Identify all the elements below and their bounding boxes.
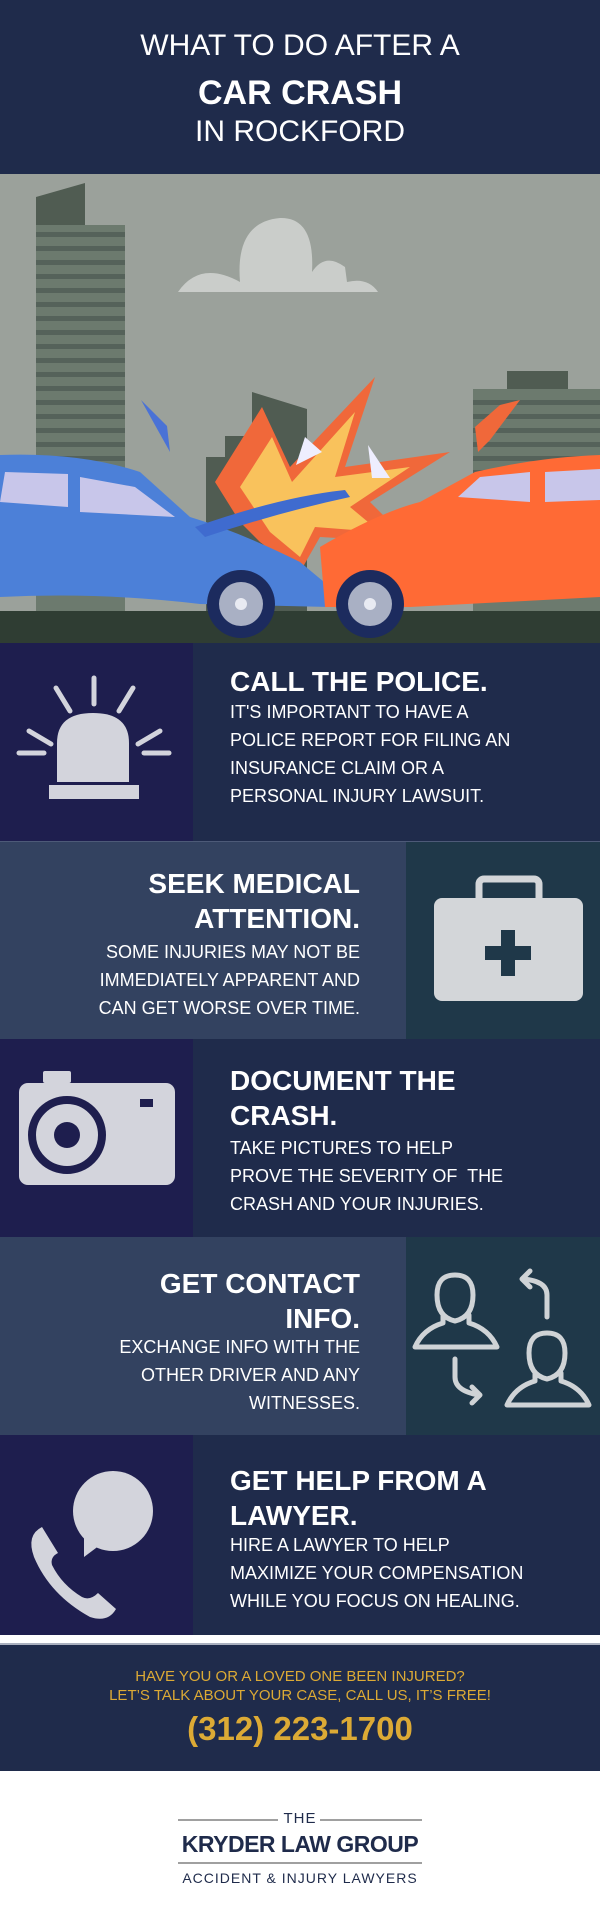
text: seek medical attention: SEEK MEDICAL	[148, 868, 360, 899]
header: CAR CRASH	[198, 74, 402, 112]
text: get help from a lawyer: LAWYER.	[230, 1500, 358, 1531]
icon: medical kit	[406, 842, 600, 1040]
step 2: seek medical attention	[0, 841, 600, 1039]
text: get contact info	[119, 1268, 360, 1413]
scene: car crash illustration	[0, 174, 600, 643]
text: get help from a lawyer: GET HELP FROM A	[230, 1465, 487, 1496]
logo: ACCIDENT & INJURY LAWYERS	[182, 1870, 418, 1886]
orange car	[320, 455, 600, 638]
text: seek medical attention: IMMEDIATELY APPARENT AND	[100, 970, 360, 990]
text: document the crash: DOCUMENT THE	[230, 1065, 456, 1096]
header	[0, 0, 600, 174]
icon: camera	[0, 1039, 193, 1237]
step 5: get help from a lawyer	[0, 1435, 600, 1635]
text: seek medical attention: CAN GET WORSE OVER TIME.	[99, 998, 360, 1018]
text: document the crash	[230, 1065, 503, 1214]
step 1: call the police	[0, 643, 600, 841]
text: get contact info: EXCHANGE INFO WITH THE	[119, 1337, 360, 1357]
text: get help from a lawyer: WHILE YOU FOCUS ON HEALING.	[230, 1591, 520, 1611]
text: get contact info: GET CONTACT	[160, 1268, 360, 1299]
icon: people exchange	[406, 1237, 600, 1435]
header: WHAT TO DO AFTER A	[140, 29, 460, 62]
logo	[178, 1810, 422, 1886]
blue car	[0, 455, 350, 638]
header: IN ROCKFORD	[195, 115, 405, 148]
footer call to action	[0, 1643, 600, 1771]
text: get contact info: INFO.	[285, 1303, 360, 1334]
step 3: document the crash	[0, 1039, 600, 1237]
text: get contact info: OTHER DRIVER AND ANY	[141, 1365, 360, 1385]
logo: THE	[284, 1810, 316, 1827]
footer call to action: (312) 223-1700	[187, 1710, 413, 1747]
text: call the police: CALL THE POLICE.	[230, 666, 488, 697]
text: get contact info: WITNESSES.	[249, 1393, 360, 1413]
text: call the police: IT'S IMPORTANT TO HAVE A	[230, 702, 468, 722]
explosion	[141, 377, 520, 572]
text: document the crash: CRASH.	[230, 1100, 337, 1131]
text: call the police	[230, 666, 510, 806]
text: call the police: PERSONAL INJURY LAWSUIT.	[230, 786, 484, 806]
footer call to action: HAVE YOU OR A LOVED ONE BEEN INJURED?	[135, 1668, 465, 1685]
ground	[0, 611, 600, 643]
icon: siren	[0, 643, 193, 841]
cloud	[178, 218, 378, 292]
text: document the crash: PROVE THE SEVERITY OF THE	[230, 1166, 503, 1186]
footer call to action: LET’S TALK ABOUT YOUR CASE, CALL US, IT’S FREE!	[109, 1687, 491, 1704]
text: seek medical attention: ATTENTION.	[194, 903, 360, 934]
text: get help from a lawyer: HIRE A LAWYER TO HELP	[230, 1535, 450, 1555]
step 4: get contact info	[0, 1237, 600, 1435]
text: document the crash: CRASH AND YOUR INJURIES.	[230, 1194, 484, 1214]
text: call the police: INSURANCE CLAIM OR A	[230, 758, 444, 778]
logo: KRYDER LAW GROUP	[182, 1831, 418, 1857]
text: get help from a lawyer: MAXIMIZE YOUR COMPENSATION	[230, 1563, 523, 1583]
icon: phone and speech bubble	[0, 1435, 193, 1635]
text: seek medical attention	[99, 868, 360, 1018]
text: get help from a lawyer	[230, 1465, 523, 1611]
text: document the crash: TAKE PICTURES TO HELP	[230, 1138, 453, 1158]
text: call the police: POLICE REPORT FOR FILING AN	[230, 730, 510, 750]
buildings	[36, 183, 600, 611]
text: seek medical attention: SOME INJURIES MAY NOT BE	[106, 942, 360, 962]
